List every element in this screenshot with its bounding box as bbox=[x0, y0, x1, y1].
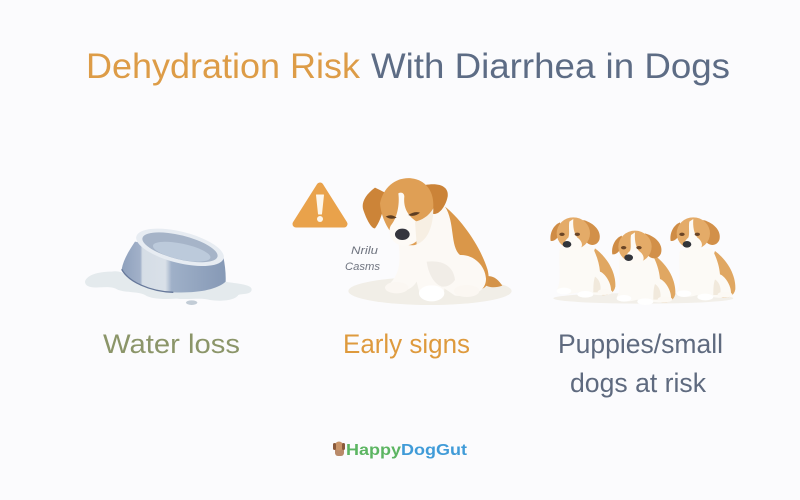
logo wordmark: Happy DogGut bbox=[346, 442, 467, 459]
illustration: sad puppy bbox=[348, 178, 512, 305]
panel: puppies and small dogs at risk bbox=[550, 217, 735, 398]
panel: water loss bbox=[85, 221, 252, 359]
title: Dehydration Risk bbox=[86, 47, 361, 86]
handwritten note: Nrilu bbox=[351, 245, 378, 257]
icon: warning triangle bbox=[296, 186, 344, 224]
handwritten note: Casms bbox=[345, 261, 381, 273]
footer logo: HappyDogGut bbox=[333, 442, 467, 459]
puppy: left bbox=[550, 217, 615, 298]
title: With Diarrhea in Dogs bbox=[371, 47, 730, 86]
label: water loss: Water loss bbox=[103, 329, 240, 359]
icon: tipped water bowl bbox=[85, 221, 252, 305]
label: puppies and small dogs at risk: dogs at risk bbox=[570, 368, 706, 398]
icon: dog logo bbox=[333, 442, 345, 456]
illustration: three puppies bbox=[550, 217, 735, 305]
label: early signs: Early signs bbox=[343, 329, 470, 359]
title bbox=[86, 47, 730, 86]
puppy: middle bbox=[612, 231, 675, 305]
label: puppies and small dogs at risk: Puppies/small bbox=[558, 329, 723, 359]
label: puppies and small dogs at risk bbox=[558, 329, 723, 398]
puppy: right bbox=[670, 217, 735, 300]
panel: early signs bbox=[296, 178, 512, 359]
handwritten note bbox=[345, 245, 381, 273]
